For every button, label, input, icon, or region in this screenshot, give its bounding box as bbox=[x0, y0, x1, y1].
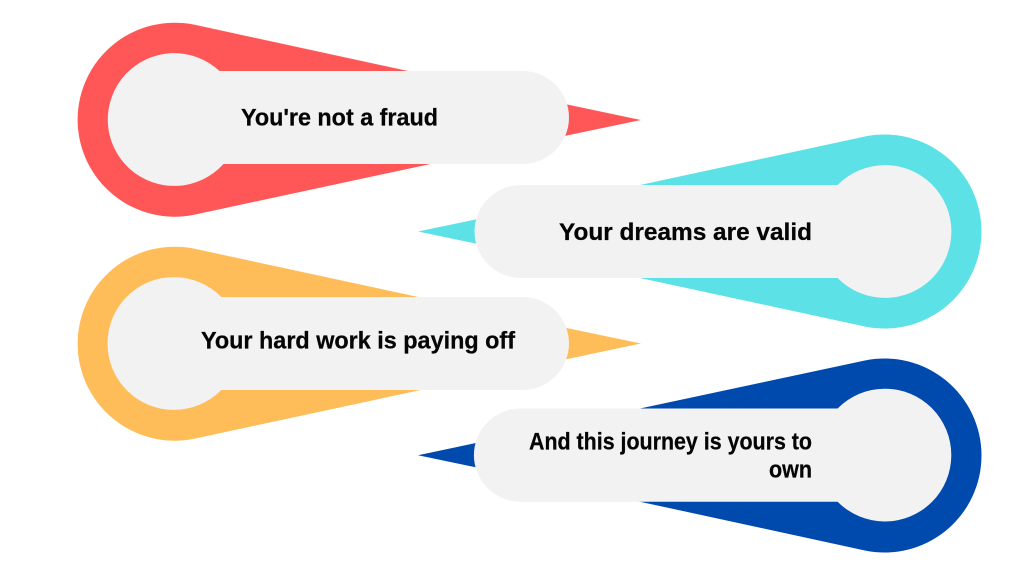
panel: You're not a fraud bbox=[78, 23, 641, 217]
text: Your hard work is paying off: Your hard work is paying off bbox=[201, 327, 516, 354]
label pill: orange bbox=[108, 277, 569, 410]
label pill: red bbox=[108, 53, 569, 186]
teardrop: blue bbox=[418, 358, 981, 552]
text: And this journey is yours to own: own bbox=[769, 456, 812, 483]
label pill: blue bbox=[474, 389, 951, 522]
panel: And this journey is yours to own bbox=[418, 358, 981, 552]
panel: Your dreams are valid bbox=[418, 134, 981, 328]
teardrop: cyan bbox=[418, 134, 981, 328]
panel: Your hard work is paying off bbox=[78, 247, 641, 441]
text: Your dreams are valid: Your dreams are valid bbox=[559, 219, 812, 246]
teardrop: red bbox=[78, 23, 641, 217]
text: You're not a fraud: You're not a fraud bbox=[241, 104, 438, 131]
text: And this journey is yours to own bbox=[529, 428, 812, 483]
label pill: cyan bbox=[474, 165, 951, 298]
text: And this journey is yours to own: And this journey is yours to bbox=[529, 428, 812, 455]
teardrop: orange bbox=[78, 247, 641, 441]
